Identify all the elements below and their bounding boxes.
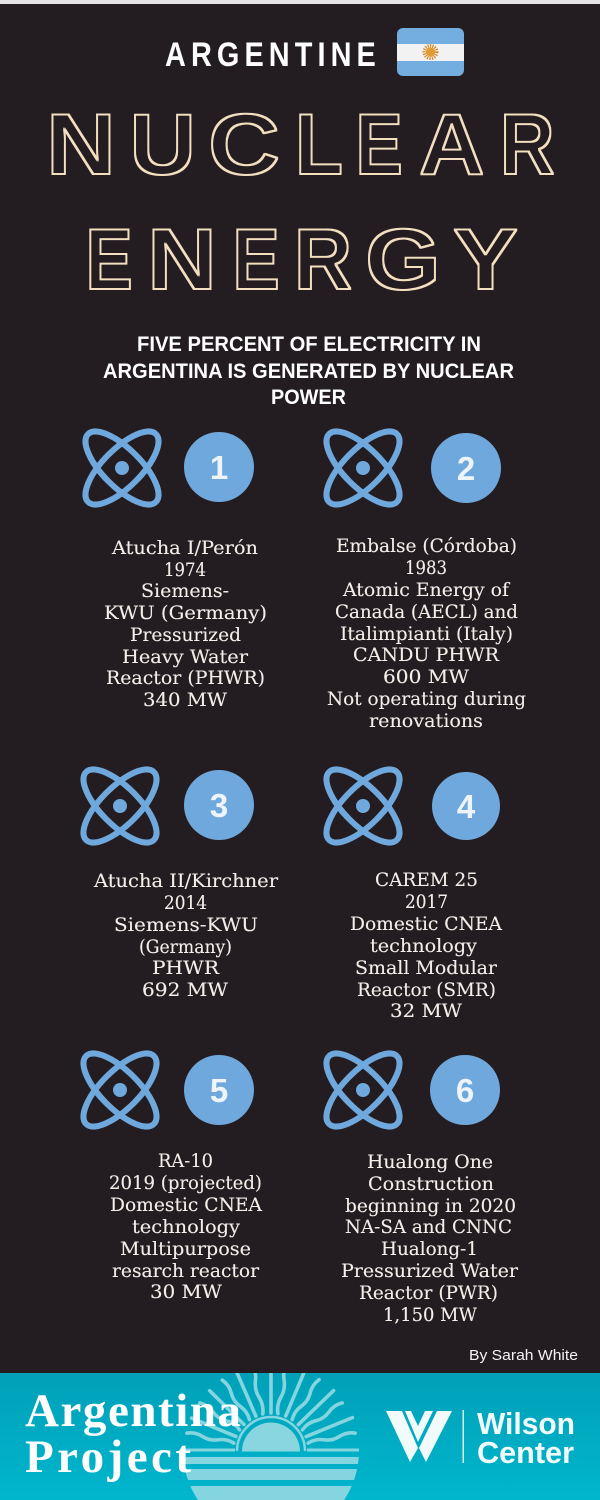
logo text: Wilson Center	[477, 1406, 575, 1470]
text: Hualong One: Reactor (PWR)	[359, 1282, 498, 1304]
text: Embalse: Canada (AECL) and	[335, 601, 518, 623]
panel: reactor 6	[316, 1043, 519, 1326]
title: Nuclear: A	[419, 97, 484, 193]
title: Energy: G	[365, 212, 441, 308]
byline: By Sarah White	[469, 1347, 578, 1364]
text: RA-10: Multipurpose	[120, 1238, 251, 1260]
number badge 1	[184, 432, 254, 502]
number badge 2	[431, 433, 501, 503]
title: Energy: N	[147, 212, 217, 308]
title: Nuclear: E	[356, 97, 403, 193]
panel: reactor 2	[316, 421, 526, 732]
title: Nuclear: N	[46, 97, 116, 193]
title: Energy: R	[294, 212, 352, 308]
logo: Wilson Center W mark	[386, 1411, 452, 1462]
panel: reactor 4	[316, 759, 502, 1022]
logo text: Wilson Center: Wilson	[477, 1406, 575, 1441]
text: Atucha I/Perón: 1974	[164, 559, 206, 581]
text: Embalse: 1983	[405, 557, 447, 579]
title: Energy: E	[86, 212, 133, 308]
text: Embalse: CANDU PHWR	[353, 644, 500, 666]
text: Hualong One: Hualong One	[367, 1151, 493, 1173]
title: Energy: E	[233, 212, 280, 308]
title: Nuclear	[46, 97, 554, 193]
text: Atucha I/Perón: Atucha I/Perón	[111, 537, 258, 559]
title: Energy: Y	[453, 212, 518, 308]
panel: reactor 5	[73, 1043, 262, 1303]
panel: reactor 1	[75, 421, 267, 711]
number badge 3: 3	[210, 787, 228, 824]
text: Hualong One	[341, 1151, 519, 1326]
title: Nuclear: R	[500, 97, 554, 193]
text: Atucha I/Perón: KWU (Germany)	[104, 602, 267, 624]
number badge 4	[432, 772, 500, 840]
text: Embalse: Italimpianti (Italy)	[340, 623, 513, 645]
text: RA-10	[109, 1150, 262, 1303]
number badge 5: 5	[210, 1072, 228, 1109]
heading: five percent of electricity: ARGENTINA IS GENERATED BY NUCLEAR	[103, 360, 514, 383]
text: Hualong One: 1,150 MW	[383, 1304, 477, 1326]
title: Nuclear: L	[295, 97, 343, 193]
text: CAREM 25: CAREM 25	[375, 869, 478, 891]
number badge 6	[430, 1055, 500, 1125]
text: CAREM 25: Domestic CNEA	[350, 913, 502, 935]
text: CAREM 25: 2017	[405, 891, 448, 913]
divider	[462, 1410, 464, 1463]
text: RA-10: RA-10	[158, 1150, 213, 1172]
number badge 4: 4	[457, 788, 476, 825]
text: Atucha II/Kirchner: PHWR	[152, 957, 220, 979]
number badge 3	[184, 770, 254, 840]
icon: atom 1	[75, 421, 169, 515]
text: Embalse: renovations	[369, 710, 483, 732]
title: Nuclear: U	[130, 97, 196, 193]
icon: atom 6	[316, 1043, 410, 1137]
number badge 2: 2	[457, 450, 475, 487]
text: Hualong One: Pressurized Water	[341, 1260, 519, 1282]
title: Energy	[86, 212, 518, 308]
text: Atucha II/Kirchner: Atucha II/Kirchner	[93, 870, 279, 892]
heading: five percent of electricity: FIVE PERCENT OF ELECTRICITY IN	[137, 333, 481, 356]
text: Atucha II/Kirchner: Siemens-KWU	[114, 914, 258, 936]
icon: atom 5	[73, 1043, 167, 1137]
heading: five percent of electricity	[103, 333, 514, 409]
icon: atom 2	[316, 421, 410, 515]
heading: five percent of electricity: POWER	[271, 386, 346, 409]
title: Nuclear: C	[208, 97, 280, 193]
text: Atucha I/Perón: Reactor (PHWR)	[106, 667, 265, 689]
title: Argentine: ARGENTINE	[165, 35, 376, 74]
logo text: Argentina Project	[25, 1385, 241, 1483]
text: RA-10: 2019 (projected)	[109, 1172, 262, 1194]
text: CAREM 25: 32 MW	[390, 1000, 462, 1022]
text: Hualong One: NA-SA and CNNC	[345, 1216, 512, 1238]
logo text: Wilson Center: Center	[477, 1435, 574, 1470]
text: Atucha II/Kirchner	[93, 870, 279, 1001]
text: CAREM 25: technology	[370, 935, 477, 957]
text: Atucha I/Perón: 340 MW	[143, 689, 227, 711]
text: CAREM 25: Reactor (SMR)	[357, 979, 496, 1001]
panel: reactor 3	[73, 759, 279, 1001]
text: Atucha I/Perón: Heavy Water	[122, 646, 249, 668]
text: Hualong One: beginning in 2020	[345, 1195, 516, 1217]
logo text: Argentina Project: Project	[25, 1431, 191, 1483]
icon: atom 4	[316, 759, 410, 853]
text: RA-10: Domestic CNEA	[110, 1194, 262, 1216]
text: Atucha I/Perón: Siemens-	[141, 580, 229, 602]
text: Embalse: Atomic Energy of	[342, 579, 511, 601]
icon: atom 3	[73, 759, 167, 853]
panel: footer	[0, 1363, 600, 1500]
number badge 6: 6	[456, 1072, 474, 1109]
text: Atucha II/Kirchner: 692 MW	[142, 979, 228, 1001]
text: Embalse: Not operating during	[327, 688, 526, 710]
icon: sun emblem	[183, 1363, 359, 1500]
text: Embalse	[327, 535, 526, 732]
icon: Argentine flag	[397, 28, 464, 76]
text: CAREM 25: Small Modular	[355, 957, 498, 979]
number badge 1: 1	[210, 449, 228, 486]
text: Embalse: 600 MW	[383, 666, 469, 688]
number badge 5	[184, 1055, 254, 1125]
text: Hualong One: Hualong-1	[381, 1238, 478, 1260]
text: Embalse: Embalse (Córdoba)	[336, 535, 517, 557]
text: Atucha I/Perón: Pressurized	[130, 624, 241, 646]
text: RA-10: resarch reactor	[112, 1260, 260, 1282]
text: RA-10: 30 MW	[150, 1281, 222, 1303]
text: RA-10: technology	[132, 1216, 240, 1238]
text: Atucha II/Kirchner: 2014	[164, 892, 207, 914]
logo text: Argentina Project: Argentina	[25, 1385, 241, 1437]
text: CAREM 25	[350, 869, 502, 1022]
text: Hualong One: Construction	[368, 1173, 494, 1195]
text: Atucha II/Kirchner: (Germany)	[139, 936, 232, 958]
text: Atucha I/Perón	[104, 537, 267, 711]
